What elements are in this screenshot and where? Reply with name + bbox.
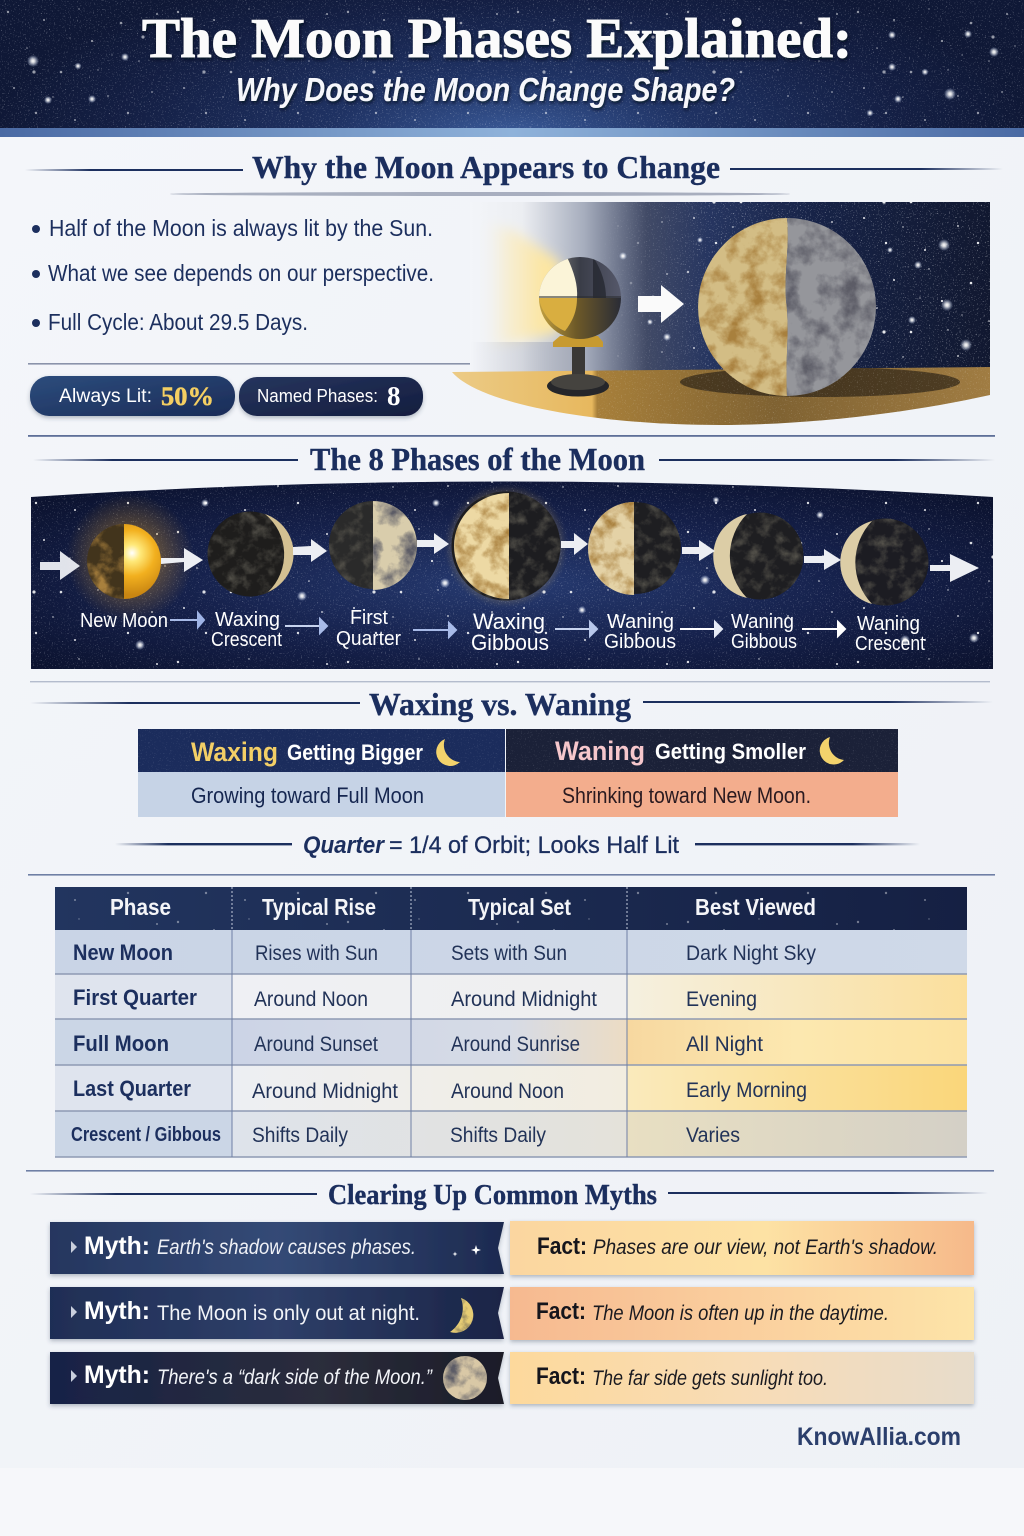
row: crescent and gibbous: Varies xyxy=(686,1124,740,1147)
fact 1: Phases are our view, not Earth's shadow. xyxy=(593,1236,938,1259)
heading: the 8 phases: The 8 Phases of the Moon xyxy=(310,441,645,477)
table header: Typical Rise xyxy=(262,894,376,920)
moon: waxing crescent xyxy=(208,512,294,596)
panel: waxing: Getting Bigger xyxy=(287,740,423,765)
row: first quarter: Evening xyxy=(686,988,757,1011)
moon: waning crescent xyxy=(840,518,928,606)
phase labels: Gibbous xyxy=(731,631,797,653)
row: last quarter xyxy=(73,1076,807,1103)
moon: first quarter xyxy=(329,501,417,590)
fact 2: The Moon is often up in the daytime. xyxy=(592,1302,889,1325)
panel: waning: Shrinking toward New Moon. xyxy=(562,783,811,808)
phase labels: Gibbous xyxy=(604,631,676,653)
myth 3: Myth: xyxy=(84,1361,150,1389)
stat pill: named phases: 8 xyxy=(387,381,400,411)
icon: full moon xyxy=(443,1356,487,1400)
phase labels: Waning xyxy=(731,611,794,633)
myth 1: Myth: xyxy=(84,1232,150,1260)
small arrows between labels xyxy=(170,613,845,637)
fact 3: Fact: xyxy=(536,1363,586,1390)
phase labels: Waxing xyxy=(473,609,545,634)
phase labels: Waning xyxy=(857,613,920,635)
row: first quarter: Around Noon xyxy=(254,988,368,1011)
phase labels: Waxing xyxy=(215,609,280,631)
brand credit: KnowAllia.com xyxy=(797,1423,961,1451)
table: rise and set times xyxy=(55,887,967,1157)
phase labels: Crescent xyxy=(855,633,925,655)
phase labels: Crescent xyxy=(211,629,282,651)
panel: waxing xyxy=(138,729,505,817)
stat pill: named phases: Named Phases: xyxy=(257,386,378,406)
panel: waxing: Growing toward Full Moon xyxy=(191,783,424,808)
phase labels: First xyxy=(350,607,388,629)
table surface xyxy=(452,365,992,427)
row: last quarter: Early Morning xyxy=(686,1079,807,1102)
row: last quarter: Around Noon xyxy=(451,1080,564,1103)
title: The Moon Phases Explained: xyxy=(142,8,852,70)
arrow xyxy=(638,285,684,323)
myth 1 xyxy=(50,1222,504,1274)
row: new moon: Dark Night Sky xyxy=(686,942,816,965)
panel: waxing: Waxing xyxy=(191,737,278,767)
row: last quarter: Around Midnight xyxy=(252,1080,398,1103)
table header: Typical Set xyxy=(468,894,571,920)
note: quarter definition: = 1/4 of Orbit; Looks Half Lit xyxy=(389,832,679,859)
icon: crescent moon xyxy=(436,739,460,766)
phase labels: Gibbous xyxy=(471,630,549,655)
subtitle: Why Does the Moon Change Shape? xyxy=(236,71,735,108)
myth 3: There's a “dark side of the Moon.” xyxy=(157,1366,433,1389)
lamp xyxy=(539,257,621,396)
heading: waxing vs waning: Waxing vs. Waning xyxy=(369,686,631,722)
header banner xyxy=(0,0,1024,137)
row: new moon: Rises with Sun xyxy=(255,942,378,965)
fact 1: Fact: xyxy=(537,1233,587,1260)
icon: crescent moon xyxy=(450,1298,473,1333)
fact 3: The far side gets sunlight too. xyxy=(592,1367,828,1390)
stat pill: always lit: 50% xyxy=(161,382,214,411)
bullet list xyxy=(32,215,434,335)
row: crescent and gibbous: Crescent / Gibbous xyxy=(71,1124,221,1146)
row: crescent and gibbous xyxy=(71,1124,740,1147)
row: new moon xyxy=(73,940,816,965)
bullet list: Half of the Moon is always lit by the Sun. xyxy=(49,215,433,241)
myth 3 xyxy=(50,1352,504,1404)
moon: waning gibbous, thin xyxy=(713,512,804,600)
note: quarter definition: Quarter xyxy=(303,832,386,859)
row: full moon xyxy=(73,1031,763,1056)
stat pill: always lit xyxy=(30,376,235,416)
panel: 8 phases band xyxy=(31,480,993,670)
table header: Phase xyxy=(110,894,171,920)
myth 2: The Moon is only out at night. xyxy=(157,1302,420,1325)
heading: why the moon appears to change xyxy=(25,149,1003,196)
row: first quarter xyxy=(73,985,757,1011)
myth 1: Earth's shadow causes phases. xyxy=(157,1236,416,1259)
row: new moon: New Moon xyxy=(73,940,173,965)
myth 2 xyxy=(50,1287,504,1339)
illustration: lamp lighting the moon xyxy=(452,202,992,427)
heading: why the moon appears to change: Why the Moon Appears to Change xyxy=(252,149,720,185)
large moon xyxy=(698,218,876,396)
fact 3 xyxy=(510,1352,974,1404)
phase labels xyxy=(80,607,925,655)
heading: clearing up common myths: Clearing Up Common Myths xyxy=(328,1180,657,1211)
icon: crescent moon xyxy=(820,737,844,764)
phase labels: Quarter xyxy=(336,628,401,650)
row: last quarter: Last Quarter xyxy=(73,1076,191,1101)
moon: new moon xyxy=(66,494,194,622)
arrows between moons xyxy=(40,533,979,582)
row: new moon: Sets with Sun xyxy=(451,942,567,965)
table cell fills xyxy=(55,930,967,1157)
panel: waning xyxy=(506,729,898,817)
panel: waning: Waning xyxy=(555,736,645,766)
bullet list: What we see depends on our perspective. xyxy=(48,260,434,286)
moon: waning gibbous xyxy=(588,502,681,595)
row: first quarter: First Quarter xyxy=(73,985,197,1010)
table header: Best Viewed xyxy=(695,894,816,920)
note: quarter definition xyxy=(115,832,920,859)
table header xyxy=(55,887,967,930)
row: full moon: Full Moon xyxy=(73,1031,169,1056)
panel: waning: Getting Smoller xyxy=(655,739,806,764)
bullet list: Full Cycle: About 29.5 Days. xyxy=(48,309,308,335)
myth 2: Myth: xyxy=(84,1297,150,1325)
night sky backdrop xyxy=(470,202,990,372)
row: full moon: Around Sunrise xyxy=(451,1033,580,1056)
fact 2 xyxy=(510,1287,974,1340)
fact 2: Fact: xyxy=(536,1298,586,1325)
row: crescent and gibbous: Shifts Daily xyxy=(252,1124,348,1147)
row: full moon: All Night xyxy=(686,1033,763,1056)
row: full moon: Around Sunset xyxy=(254,1033,378,1056)
moon: waxing gibbous xyxy=(448,488,564,604)
fact 1 xyxy=(510,1221,974,1275)
stat pill: named phases xyxy=(239,377,423,416)
row: crescent and gibbous: Shifts Daily xyxy=(450,1124,546,1147)
stat pill: always lit: Always Lit: xyxy=(59,386,152,407)
row: first quarter: Around Midnight xyxy=(451,988,597,1011)
phase labels: Waning xyxy=(607,611,674,633)
phase labels: New Moon xyxy=(80,610,168,632)
